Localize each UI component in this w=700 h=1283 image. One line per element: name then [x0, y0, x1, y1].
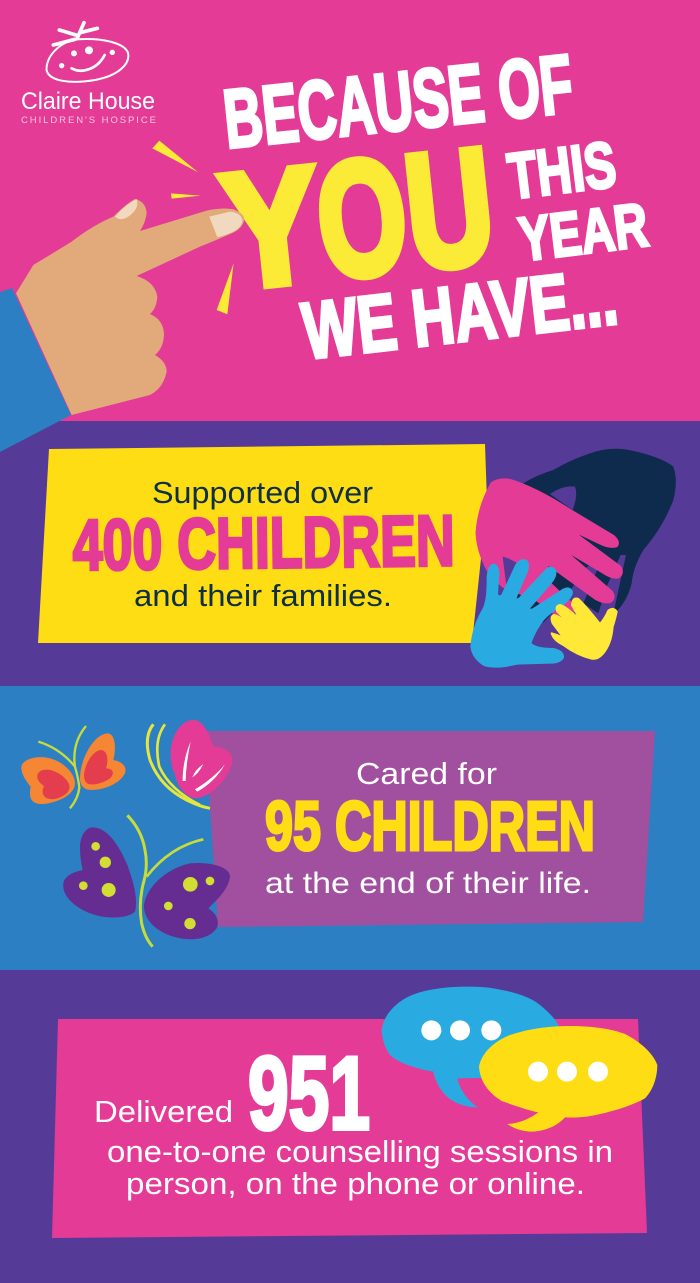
- orange butterfly: [21, 726, 126, 808]
- background: pink header band: [0, 0, 700, 421]
- icon: smiling face: [47, 23, 128, 82]
- hand: [16, 199, 244, 415]
- purple butterfly: [63, 815, 230, 947]
- thumbnail: [115, 199, 137, 219]
- title: [214, 37, 652, 376]
- panel: 951 counselling sessions: [52, 1019, 647, 1238]
- text: delivered: Delivered: [94, 1094, 233, 1129]
- text: person, on the phone or online: person, on the phone or online.: [126, 1166, 585, 1201]
- dark adult hand: [510, 449, 676, 623]
- yellow hand: [552, 598, 617, 659]
- panel: 400 children: [38, 444, 487, 643]
- title word: year: YEAR: [515, 191, 652, 275]
- blue speech bubble: [382, 987, 560, 1107]
- text: cared for: Cared for: [356, 756, 497, 791]
- background: lower purple band: [0, 970, 700, 1283]
- stat: 951: 951: [248, 1036, 370, 1152]
- fingernail: [209, 212, 242, 237]
- title word: you: U: [397, 113, 502, 304]
- blue bubble dots: [421, 1020, 501, 1040]
- icon: speech bubbles: [382, 987, 657, 1132]
- logo strapline: CHILDREN'S HOSPICE: [21, 115, 156, 126]
- title word: you: [214, 113, 502, 323]
- text: one-to-one counselling sessions in: one-to-one counselling sessions in: [107, 1134, 613, 1169]
- pink hand: [477, 480, 622, 620]
- blue hand: [472, 561, 572, 666]
- background: blue band: [0, 686, 700, 970]
- gap between fingers: [550, 486, 576, 510]
- yellow speech bubble: [479, 1026, 657, 1132]
- pink butterfly: [147, 720, 232, 808]
- sleeve: [0, 288, 71, 452]
- panel background: [205, 731, 655, 927]
- panel: 95 children: [205, 731, 655, 927]
- logo wordmark: Claire House: [21, 88, 155, 115]
- background: purple band: [0, 421, 700, 686]
- yellow bubble dots: [528, 1062, 608, 1082]
- text: and their families: and their families.: [134, 578, 392, 613]
- title word: you: O: [309, 122, 415, 313]
- icon: butterflies: [21, 720, 232, 947]
- icon: emphasis sparks: [152, 141, 234, 314]
- logo: Claire House Children's Hospice: [21, 23, 156, 126]
- icon: pointing hand with sleeve: [0, 199, 244, 452]
- icon: overlapping hands: [472, 449, 676, 666]
- text: supported over: Supported over: [152, 475, 373, 510]
- stat: 400 children: 400 CHILDREN: [72, 501, 455, 586]
- gap in pink palm: [503, 557, 520, 588]
- panel background: [38, 444, 487, 643]
- panel background: [52, 1019, 647, 1238]
- text: at the end of their life: at the end of their life.: [265, 867, 591, 900]
- title word: this: THIS: [504, 127, 620, 213]
- title word: you: Y: [214, 131, 329, 323]
